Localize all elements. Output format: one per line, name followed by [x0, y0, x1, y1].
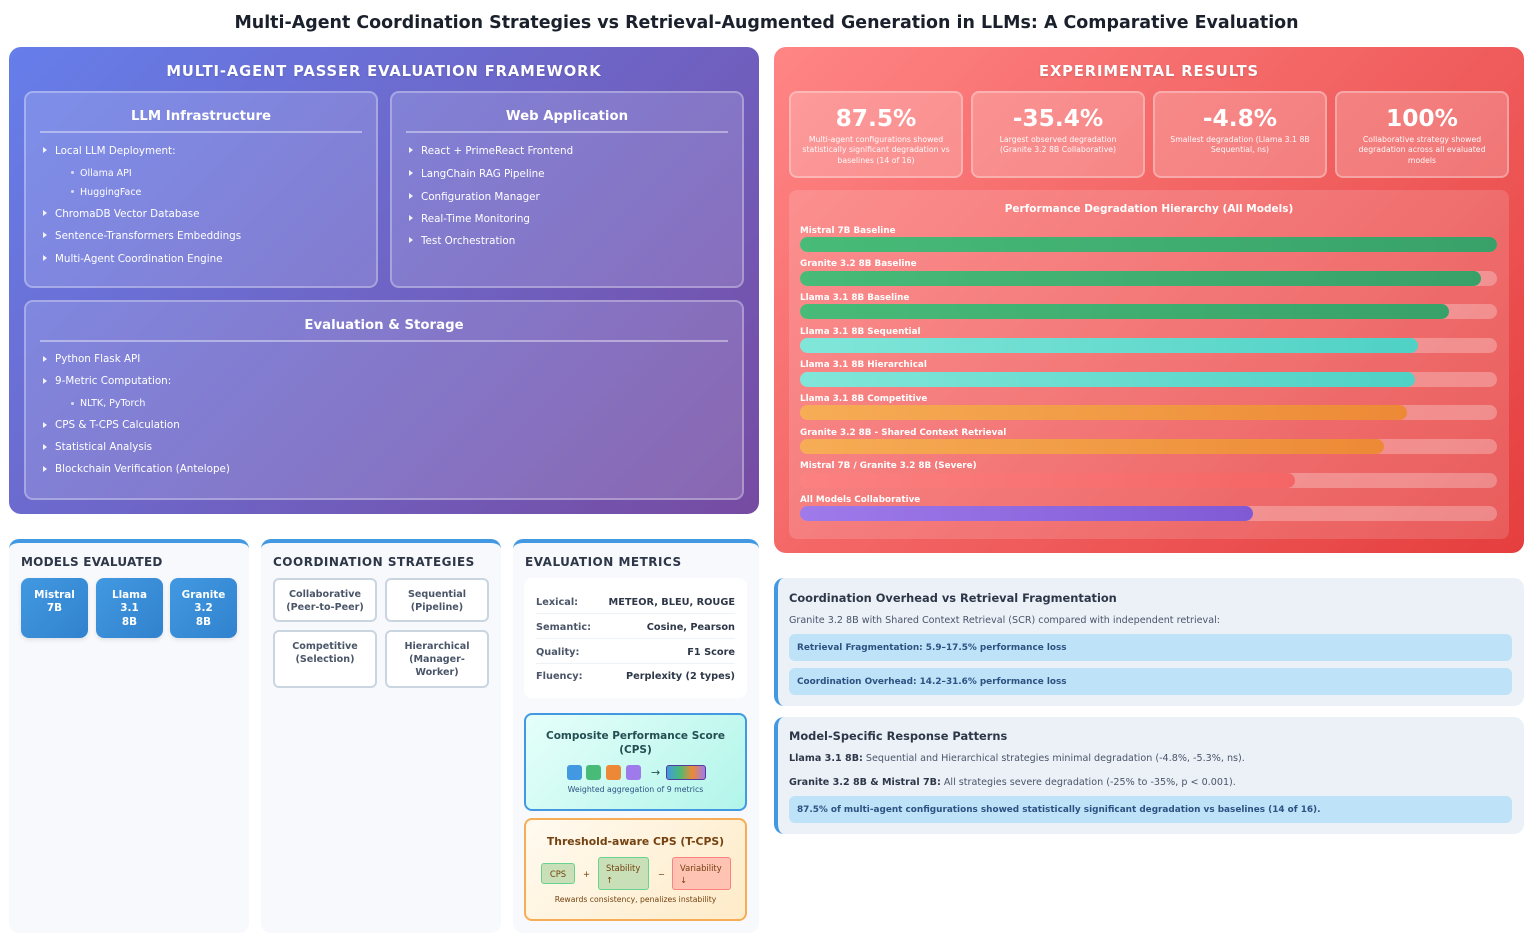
metrics table: Lexical:	[536, 597, 578, 608]
insight heading: Model-Specific Response Patterns	[789, 729, 1007, 743]
bar: Llama 3.1 8B Baseline: Llama 3.1 8B Baseline	[800, 293, 909, 303]
box: evaluation and storage: Evaluation & Storage	[304, 318, 464, 332]
bar: Llama 3.1 8B Baseline	[800, 293, 1497, 319]
box: LLM infrastructure: ChromaDB Vector Database	[55, 208, 200, 220]
stat: 100%: Collaborative strategy showed degradation across all evaluated models	[1358, 135, 1486, 165]
insight description: Granite 3.2 8B with Shared Context Retrieval (SCR) compared with independent retrieval:	[789, 614, 1220, 626]
model: Llama 3.1 8B	[96, 578, 163, 638]
formula: CPS + stability - variability: Variability	[680, 863, 722, 873]
box: LLM infrastructure: Sentence-Transformers Embeddings	[55, 230, 241, 242]
strategy: collaborative: (Peer-to-Peer)	[286, 602, 364, 613]
metrics table: Semantic:	[536, 622, 591, 632]
strategy: competitive	[273, 630, 377, 688]
metrics table: Fluency:	[536, 671, 583, 682]
metrics table: Perplexity (2 types)	[626, 671, 735, 682]
bar: Llama 3.1 8B Competitive	[800, 394, 1497, 420]
bar: Llama 3.1 8B Hierarchical: Llama 3.1 8B Hierarchical	[800, 360, 927, 370]
metrics table: F1 Score	[687, 646, 735, 658]
model: Granite 3.2 8B	[170, 578, 237, 638]
model: Llama 3.1 8B: Llama	[112, 589, 147, 601]
highlight: coordination overhead: Coordination Overhead: 14.2–31.6% performance loss	[797, 677, 1067, 687]
bar: Granite 3.2 8B Baseline: Granite 3.2 8B Baseline	[800, 259, 917, 269]
strategy: collaborative	[273, 578, 377, 622]
bar: Granite 3.2 8B Baseline	[800, 259, 1497, 286]
model: Mistral 7B: 7B	[47, 602, 62, 614]
Llama finding: Llama 3.1 8B: Sequential and Hierarchical strategies minimal degradation (-4.8%, -5.3%, ns).	[789, 753, 1245, 764]
stat: 87.5%: Multi-agent configurations showed statistically significant degradation vs baselines (14 of 16)	[802, 135, 950, 165]
box: LLM infrastructure: Local LLM Deployment:	[55, 144, 176, 156]
stat: -35.4%: Largest observed degradation	[1000, 135, 1116, 144]
model: Granite 3.2 8B: Granite	[182, 589, 225, 601]
bar: Granite 3.2 8B Shared Context Retrieval	[800, 428, 1497, 454]
bar: Llama 3.1 8B Competitive: Llama 3.1 8B Competitive	[800, 394, 927, 404]
chart: performance degradation hierarchy: Performance Degradation Hierarchy (All Models)	[1005, 202, 1293, 214]
box: web application: Real-Time Monitoring	[421, 212, 530, 224]
model: Mistral 7B	[21, 578, 88, 638]
panel: model-specific response patterns	[774, 717, 1524, 834]
results heading: EXPERIMENTAL RESULTS	[1039, 63, 1259, 80]
box: LLM infrastructure: Ollama API	[80, 168, 132, 179]
strategy: collaborative: Collaborative	[289, 589, 361, 600]
box: LLM infrastructure: Multi-Agent Coordination Engine	[55, 252, 223, 264]
strategy: competitive: Competitive	[292, 641, 358, 652]
model: Granite 3.2 8B: 3.2	[194, 602, 213, 614]
strategy: competitive: (Selection)	[296, 654, 354, 665]
box: evaluation and storage: Python Flask API	[55, 353, 140, 365]
box: LLM infrastructure: HuggingFace	[80, 187, 141, 198]
stat: -4.8%: Smallest degradation (Llama 3.1 8B Sequential, ns)	[1170, 135, 1310, 154]
box: web application	[390, 91, 744, 288]
box: web application: React + PrimeReact Frontend	[421, 144, 573, 156]
metrics heading: EVALUATION METRICS	[525, 555, 682, 569]
bar: Mistral 7B Baseline: Mistral 7B Baseline	[800, 226, 896, 236]
highlight: coordination overhead	[789, 668, 1512, 695]
title: Multi-Agent Coordination Strategies vs Retrieval-Augmented Generation in LLMs: A Comparative Evaluation	[234, 13, 1299, 33]
formula: CPS + stability - variability: Stability	[606, 863, 640, 873]
strategy: sequential: (Pipeline)	[411, 602, 463, 613]
bar: Llama 3.1 8B Sequential	[800, 327, 1497, 353]
metrics table: Quality:	[536, 646, 579, 658]
bar: Llama 3.1 8B Hierarchical	[800, 360, 1497, 387]
box: web application: Configuration Manager	[421, 190, 540, 202]
stat: -35.4%: -35.4%	[1013, 105, 1103, 132]
metrics table	[524, 578, 747, 698]
Granite and Mistral finding: Granite 3.2 8B & Mistral 7B: All strategies severe degradation (-25% to -35%, p < 0.001).	[789, 776, 1236, 788]
T-CPS caption: Rewards consistency, penalizes instability	[555, 895, 716, 904]
insight heading: Coordination Overhead vs Retrieval Fragmentation	[789, 590, 1117, 604]
icon: metric squares to composite: →	[651, 766, 660, 779]
box: web application: LangChain RAG Pipeline	[421, 168, 545, 180]
box: LLM infrastructure: LLM Infrastructure	[131, 109, 271, 124]
CPS caption: Weighted aggregation of 9 metrics	[568, 785, 703, 794]
metrics table: METEOR, BLEU, ROUGE	[609, 597, 735, 608]
box: evaluation and storage: 9-Metric Computation:	[55, 375, 171, 387]
panel: experimental results	[774, 47, 1524, 553]
T-CPS box	[524, 818, 747, 921]
bar: All Models Collaborative: All Models Collaborative	[800, 495, 920, 505]
CPS title	[546, 730, 725, 756]
box: evaluation and storage: CPS & T-CPS Calculation	[55, 419, 180, 431]
stat: 87.5%	[789, 91, 963, 178]
strategy: hierarchical: Worker)	[415, 667, 459, 678]
stat: 100%: 100%	[1386, 105, 1458, 132]
bar: Granite 3.2 8B Shared Context Retrieval: Granite 3.2 8B - Shared Context Retrieval	[800, 428, 1006, 438]
bar: Mistral 7B Baseline	[800, 226, 1497, 252]
highlight: retrieval fragmentation	[789, 634, 1512, 661]
stat: -35.4%	[971, 91, 1145, 178]
stat: -4.8%: -4.8%	[1203, 105, 1277, 132]
bar: All Models Collaborative	[800, 495, 1497, 521]
model: Llama 3.1 8B: 3.1	[120, 602, 139, 614]
box: web application: Web Application	[506, 109, 628, 124]
T-CPS title: Threshold-aware CPS (T-CPS)	[547, 834, 724, 848]
formula: CPS + stability - variability: +	[583, 869, 590, 879]
highlight: significance	[789, 796, 1512, 823]
formula: CPS + stability - variability: CPS	[550, 869, 566, 879]
box: evaluation and storage: Blockchain Verification (Antelope)	[55, 463, 230, 475]
CPS box	[524, 713, 747, 810]
strategy: sequential: Sequential	[408, 589, 466, 600]
stat: -35.4%: (Granite 3.2 8B Collaborative)	[1000, 145, 1116, 154]
model: Mistral 7B: Mistral	[34, 589, 75, 601]
strategy: hierarchical	[385, 630, 489, 688]
chart: performance degradation hierarchy	[789, 190, 1509, 539]
highlight: significance: 87.5% of multi-agent configurations showed statistically significant degradation vs baselines (14 of 16).	[797, 805, 1320, 815]
formula: CPS + stability - variability: ↓	[680, 875, 687, 885]
box: evaluation and storage: NLTK, PyTorch	[80, 398, 145, 409]
panel: coordination overhead vs retrieval fragmentation	[774, 578, 1524, 706]
formula: CPS + stability - variability: ↑	[606, 875, 613, 885]
box: web application: Test Orchestration	[421, 234, 515, 246]
bar: Llama 3.1 8B Sequential: Llama 3.1 8B Sequential	[800, 327, 921, 337]
formula: CPS + stability - variability	[541, 857, 731, 890]
model: Llama 3.1 8B: 8B	[122, 616, 137, 628]
bar: Mistral / Granite severe	[800, 461, 1497, 488]
strategy: sequential	[385, 578, 489, 622]
CPS title: Composite Performance Score	[546, 730, 725, 742]
icon: metric squares to composite	[567, 765, 706, 780]
CPS title: (CPS)	[619, 744, 652, 756]
panel: models evaluated	[9, 539, 249, 933]
stat: 100%	[1335, 91, 1509, 178]
formula: CPS + stability - variability: −	[658, 869, 665, 879]
box: evaluation and storage: Statistical Analysis	[55, 441, 152, 453]
box: LLM infrastructure	[24, 91, 378, 288]
strategies heading: COORDINATION STRATEGIES	[273, 555, 475, 569]
panel: evaluation framework	[9, 47, 759, 514]
highlight: retrieval fragmentation: Retrieval Fragmentation: 5.9–17.5% performance loss	[797, 643, 1067, 653]
models heading: MODELS EVALUATED	[21, 555, 163, 569]
stat: 87.5%: 87.5%	[836, 105, 916, 132]
panel: evaluation metrics	[513, 539, 759, 933]
box: evaluation and storage	[24, 300, 744, 500]
panel: coordination strategies	[261, 539, 501, 933]
metrics table: Cosine, Pearson	[647, 622, 735, 632]
stat: -4.8%	[1153, 91, 1327, 178]
bar: Mistral / Granite severe: Mistral 7B / Granite 3.2 8B (Severe)	[800, 461, 977, 471]
model: Granite 3.2 8B: 8B	[196, 616, 211, 628]
strategy: hierarchical: Hierarchical	[404, 641, 470, 652]
strategy: hierarchical: (Manager-	[409, 654, 465, 665]
framework heading: MULTI-AGENT PASSER EVALUATION FRAMEWORK	[166, 63, 602, 80]
